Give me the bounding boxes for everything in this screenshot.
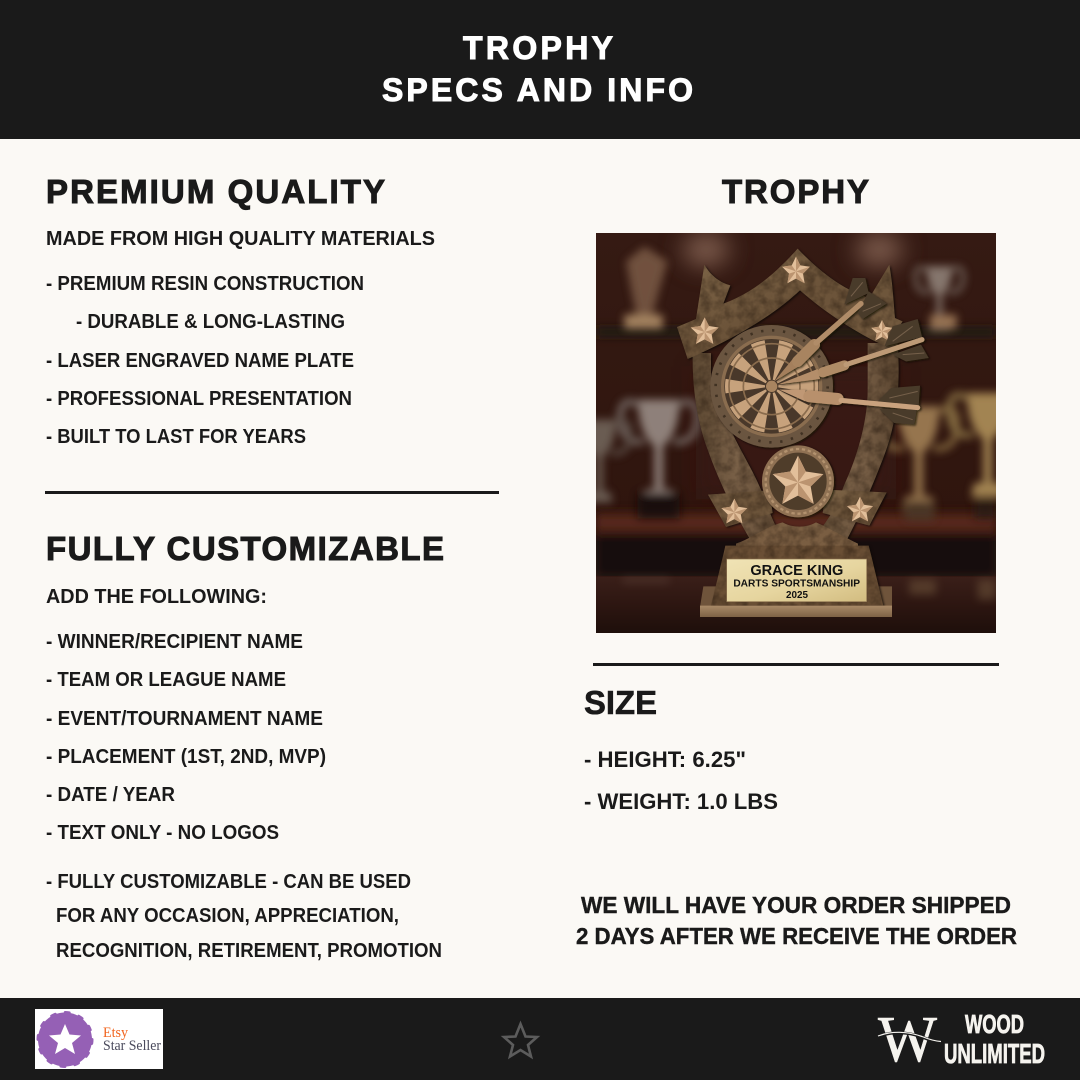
shipping note bbox=[576, 892, 1017, 949]
heading: trophy: TROPHY bbox=[722, 173, 869, 210]
intro line: materials: MADE FROM HIGH QUALITY MATERIALS bbox=[46, 228, 435, 250]
logo: wood unlimited bbox=[878, 1003, 1045, 1076]
dart 3 bbox=[779, 386, 920, 425]
trophy base pedestal bbox=[711, 546, 883, 606]
name plate: award: DARTS SPORTSMANSHIP bbox=[733, 579, 860, 590]
medal bbox=[762, 445, 834, 517]
lower left banner bbox=[708, 490, 773, 527]
list: customization options: - TEAM OR LEAGUE NAME bbox=[46, 669, 286, 691]
shipping note: 2 DAYS AFTER WE RECEIVE THE ORDER bbox=[576, 923, 1017, 949]
trophy shield arms bbox=[693, 353, 784, 545]
header title line 1: TROPHY bbox=[463, 30, 613, 66]
logo text: wood: WOOD bbox=[965, 1009, 1024, 1039]
photo background: blurred trophy cabinet bbox=[568, 233, 1026, 633]
list: customization options: - TEXT ONLY - NO LOGOS bbox=[46, 822, 279, 844]
heading: size: SIZE bbox=[584, 684, 657, 721]
star: top bbox=[782, 257, 810, 283]
icon: outlined star bbox=[504, 1024, 537, 1056]
text block: occasions: - FULLY CUSTOMIZABLE - CAN BE USED bbox=[46, 871, 411, 893]
list: customization options: - DATE / YEAR bbox=[46, 784, 176, 806]
etsy label: Etsy bbox=[103, 1025, 128, 1041]
trophy foot bbox=[700, 606, 892, 617]
dart 1 bbox=[774, 278, 887, 381]
list: quality points: - PREMIUM RESIN CONSTRUCTION bbox=[46, 273, 364, 295]
dart 2 bbox=[778, 319, 929, 385]
trophy body: arms, band and base bbox=[677, 249, 903, 606]
photo: darts trophy on shelf background bbox=[596, 233, 996, 633]
left silver cup bbox=[620, 400, 697, 503]
list: quality points: - PROFESSIONAL PRESENTATION bbox=[46, 388, 352, 410]
list: quality points bbox=[46, 273, 364, 448]
list: quality points: - DURABLE & LONG-LASTING bbox=[76, 311, 345, 333]
top left bronze trophy bbox=[626, 246, 668, 315]
top right silver cup bbox=[915, 266, 963, 330]
footer band bbox=[0, 998, 1080, 1080]
heading: fully customizable: FULLY CUSTOMIZABLE bbox=[46, 530, 444, 567]
star: left bbox=[691, 317, 719, 344]
text block: occasions: RECOGNITION, RETIREMENT, PROMOTION bbox=[56, 940, 442, 962]
far right gold cup bbox=[949, 393, 1026, 496]
shipping note: WE WILL HAVE YOUR ORDER SHIPPED bbox=[581, 892, 1011, 918]
panel: size bbox=[584, 684, 778, 814]
trophy base upper piece bbox=[736, 522, 858, 550]
name plate: year: 2025 bbox=[786, 590, 809, 601]
spec: weight: - WEIGHT: 1.0 LBS bbox=[584, 789, 778, 814]
header title line 2: SPECS AND INFO bbox=[382, 72, 693, 108]
text block: occasions: FOR ANY OCCASION, APPRECIATION, bbox=[56, 905, 399, 927]
spec: height: - HEIGHT: 6.25" bbox=[584, 747, 746, 772]
intro line: add the following: ADD THE FOLLOWING: bbox=[46, 586, 267, 608]
logo mark: W with swoosh: W bbox=[878, 1003, 938, 1076]
trophy bbox=[677, 249, 929, 617]
name plate: name: GRACE KING bbox=[750, 563, 843, 579]
right gold cup bbox=[880, 406, 957, 510]
list: customization options: - WINNER/RECIPIENT NAME bbox=[46, 631, 303, 653]
list: customization options: - PLACEMENT (1ST, 2ND, MVP) bbox=[46, 746, 326, 768]
trophy top chevron band bbox=[677, 249, 903, 359]
star: lower right bbox=[847, 497, 873, 521]
badge: etsy star seller bbox=[35, 1009, 163, 1069]
list: quality points: - LASER ENGRAVED NAME PLATE bbox=[46, 350, 354, 372]
list: quality points: - BUILT TO LAST FOR YEARS bbox=[46, 426, 306, 448]
panel: premium quality bbox=[46, 173, 435, 448]
trophy foot side wedges bbox=[700, 586, 892, 607]
lower right banner bbox=[823, 490, 887, 526]
list: customization options: - EVENT/TOURNAMENT NAME bbox=[46, 708, 323, 730]
panel: fully customizable bbox=[46, 530, 444, 962]
text block: occasions bbox=[46, 871, 442, 962]
heading: premium quality: PREMIUM QUALITY bbox=[46, 173, 385, 210]
name plate bbox=[727, 559, 867, 602]
far left cup bbox=[568, 420, 630, 502]
header band bbox=[0, 0, 1080, 139]
dartboard bbox=[710, 325, 833, 448]
icon: purple scalloped badge bbox=[38, 1012, 92, 1066]
list: customization options bbox=[46, 631, 326, 844]
star seller label: Star Seller bbox=[103, 1038, 161, 1054]
star: right bbox=[871, 320, 893, 341]
star: lower left bbox=[721, 499, 747, 523]
